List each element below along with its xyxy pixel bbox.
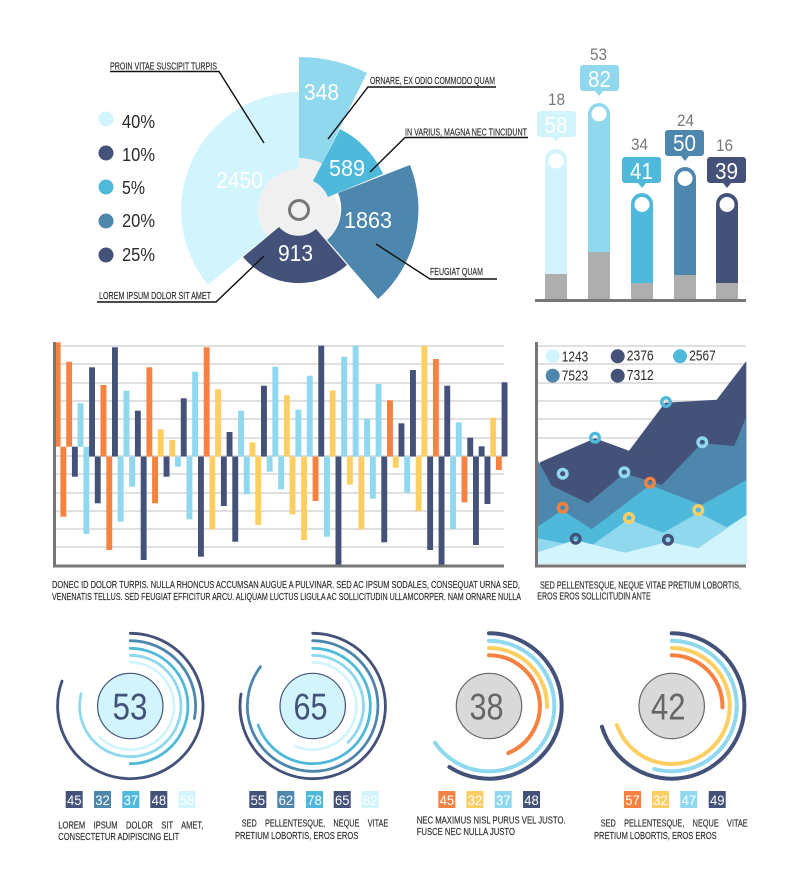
chart axes [54,342,504,566]
pie callout: ornare [328,75,496,139]
text block: area chart description: EROS EROS SOLLICITUDIN ANTE [537,590,651,602]
panel: stacked area chart [536,342,746,566]
gauge centre 53 [98,673,163,739]
panel: radial pie chart [181,57,418,299]
area chart axes [536,342,746,566]
pie callout: in varius [370,126,528,172]
bar 50 [665,111,704,300]
bar 41 [622,135,661,300]
value boxes: gauge 42 [624,791,726,808]
text block: bar chart description [52,579,521,603]
panel: radial gauge 38: 38 [470,686,504,727]
area light blue [538,513,746,563]
caption: gauge 38: FUSCE NEC NULLA JUSTO [417,826,515,838]
centre ring [290,200,308,220]
wedge 913 [243,227,347,283]
pie callout: lorem [97,256,264,302]
pie callout: ornare: ORNARE, EX ODIO COMMODO QUAM [370,75,495,87]
bar chart baseline [535,299,746,302]
pie callout: proin vitae [110,60,264,143]
caption: gauge 42 [594,818,748,842]
legend: area chart values: 1243 [562,349,588,366]
caption: gauge 65 [235,818,388,842]
legend: percentages: 20% [122,211,155,231]
value boxes: gauge 38: 37 [496,792,511,808]
area cyan [538,480,746,563]
value boxes: gauge 53: 32 [95,792,110,808]
value boxes: gauge 53: 37 [124,792,138,808]
gauge centre 38 [456,673,522,739]
caption: gauge 38: NEC MAXIMUS NISL PURUS VEL JUSTO. [417,814,566,826]
bar 82 [580,45,619,300]
area lightest [538,515,746,563]
value boxes: gauge 42: 32 [653,792,668,808]
caption: gauge 53: LOREM IPSUM DOLOR SIT AMET, [58,819,203,831]
value boxes: gauge 53: 48 [152,792,166,808]
value boxes: gauge 65: 65 [335,792,350,808]
panel: radial gauge 38 [435,633,562,779]
legend: area chart values [546,348,716,385]
value boxes: gauge 53 [66,791,195,808]
bar 58: 58 [544,112,568,138]
pie callout: feugiat: FEUGIAT QUAM [430,266,483,278]
caption: gauge 53 [58,819,203,843]
wedge 2450 [181,92,299,285]
panel: pill bar chart [535,45,746,302]
text block: bar chart description: VENENATIS TELLUS. SED FEUGIAT EFFICITUR ARCU. ALIQUAM LUCTUS LIGULA AC SOLLICITUDIN ULLAMCORPER. NAM ORNARE NULLA [52,591,521,603]
bar 39: 16 [716,136,733,155]
value boxes: gauge 65: 62 [279,792,293,808]
text block: area chart description [537,579,741,602]
value boxes: gauge 38: 48 [524,792,539,808]
area steel blue [538,417,746,563]
legend: percentages: 40% [122,112,155,132]
text block: bar chart description: DONEC ID DOLOR TURPIS. NULLA RHONCUS ACCUMSAN AUGUE A PULVINAR. SED AC IPSUM SODALES, CONSEQUAT URNA SED, [52,579,520,591]
bar 58 [537,90,576,300]
legend: area chart values: 7312 [627,367,654,384]
value boxes: gauge 65: 78 [307,792,322,808]
bar 82: 53 [590,45,607,64]
legend: percentages: 10% [122,145,155,165]
value 348: 348 [304,79,339,105]
legend: area chart values: 2567 [689,348,716,365]
panel: radial gauge 42 [602,633,744,779]
value boxes: gauge 38 [438,791,540,808]
caption: gauge 38 [417,814,566,838]
value boxes: gauge 65: 55 [251,792,265,808]
legend: area chart values: 7523 [562,368,588,385]
value boxes: gauge 42: 49 [710,792,725,808]
wedge 589 [313,129,383,197]
caption: gauge 53: CONSECTETUR ADIPISCING ELIT [58,831,180,843]
pie centre disc [258,158,340,251]
pie callout: lorem: LOREM IPSUM DOLOR SIT AMET [99,290,211,302]
bar 50: 24 [677,111,694,130]
value boxes: gauge 65: 82 [363,792,378,808]
value 2450: 2450 [216,167,263,193]
value 589: 589 [329,155,365,181]
bar 82: 82 [588,66,611,92]
value boxes: gauge 42: 57 [625,792,640,808]
panel: diverging bar chart [54,342,508,566]
bar 39: 39 [715,158,738,184]
value boxes: gauge 65 [249,791,379,808]
panel: radial gauge 53 [58,633,203,779]
caption: gauge 42: PRETIUM LOBORTIS, EROS EROS [594,830,717,842]
value boxes: gauge 53: 58 [180,792,194,808]
area navy [538,361,746,563]
bar 41: 41 [630,158,653,184]
legend: percentages: 5% [122,178,145,198]
bar 39 [707,136,746,300]
data markers [558,398,707,544]
bar 50: 50 [673,130,696,156]
caption: gauge 65: PRETIUM LOBORTIS, EROS EROS [235,830,358,842]
panel: radial gauge 53: 53 [112,686,148,727]
gauge centre 42 [639,673,704,739]
value 1863: 1863 [344,207,392,233]
wedge 348 [299,57,367,163]
caption: gauge 65: SED PELLENTESQUE, NEQUE VITAE [242,818,388,830]
gauge centre 65 [280,673,345,739]
panel: radial gauge 65: 65 [294,686,328,727]
value boxes: gauge 38: 32 [468,792,482,808]
pie callout: proin vitae: PROIN VITAE SUSCIPIT TURPIS [110,60,217,72]
legend: percentages [98,112,155,265]
bar 58: 18 [548,90,565,109]
bar 41: 34 [631,135,648,154]
pie callout: in varius: IN VARIUS, MAGNA NEC TINCIDUNT [405,126,527,138]
value boxes: gauge 38: 45 [440,792,454,808]
value boxes: gauge 42: 47 [682,792,696,808]
pie callout: feugiat [376,244,497,279]
panel: radial gauge 42: 42 [651,686,686,727]
panel: radial gauge 65 [240,633,385,779]
legend: percentages: 25% [122,245,155,265]
value 913: 913 [278,240,313,266]
value boxes: gauge 53: 45 [67,792,82,808]
wedge 1863 [327,165,418,299]
legend: area chart values: 2376 [627,348,654,365]
